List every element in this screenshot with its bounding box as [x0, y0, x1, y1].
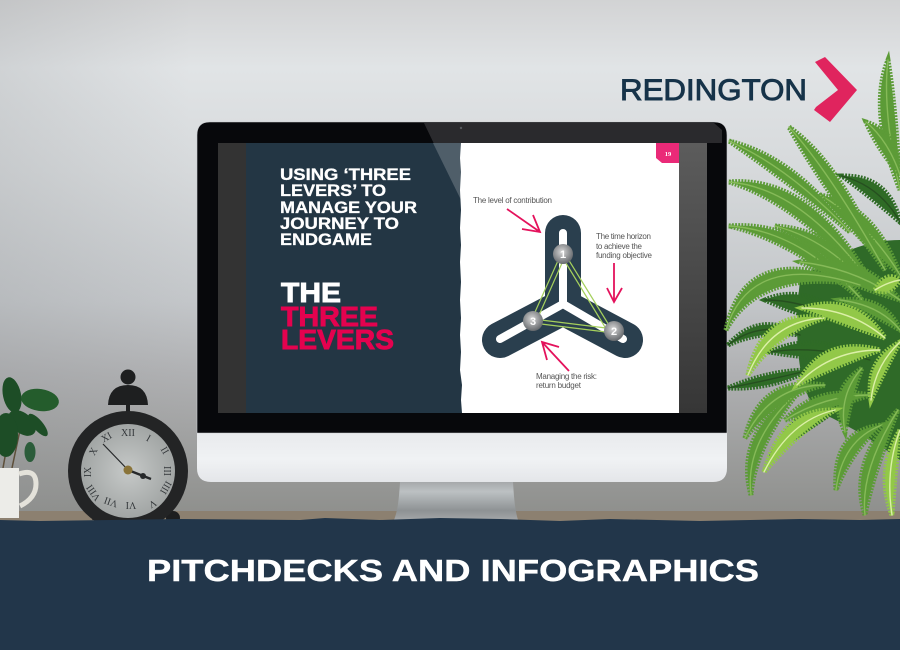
- page number tag: 19: [665, 151, 672, 158]
- lever ball 1: 1: [560, 249, 566, 261]
- banner rough top edge: [0, 518, 900, 650]
- green connecting lines: [531, 254, 614, 333]
- frond 1: [729, 141, 850, 232]
- plant stems: [3, 430, 20, 468]
- label: time horizon: to achieve the: [596, 242, 643, 251]
- slide title: the three levers: THE: [281, 277, 341, 308]
- frond 4: [729, 226, 862, 300]
- plant leaves: [0, 376, 60, 462]
- slide heading: USING ‘THREE: [280, 166, 411, 184]
- clock neck: [126, 404, 130, 414]
- clock numerals: V: [146, 497, 158, 510]
- coffee cup: [0, 468, 19, 518]
- frond mid dark right: [840, 299, 900, 330]
- label: level of contribution: The level of contribution: [473, 196, 552, 205]
- label: managing the risk: [536, 372, 597, 390]
- desktop computer monitor: [197, 122, 727, 520]
- clock numerals: VIII: [85, 482, 103, 503]
- monitor chin: [197, 425, 727, 482]
- frond bright tip right: [875, 277, 900, 292]
- clock numerals: XII: [121, 428, 135, 439]
- banner caption: PITCHDECKS AND INFOGRAPHICS: [147, 553, 759, 588]
- lever ball 3: 3: [530, 316, 536, 328]
- clock numerals: [83, 428, 173, 510]
- slide: right margin: [679, 143, 707, 413]
- arrow: contribution: [507, 209, 540, 232]
- clock numerals: XI: [99, 430, 114, 445]
- slide heading: [280, 166, 417, 249]
- frond mid lower: [838, 368, 862, 432]
- frond 3: [729, 182, 875, 290]
- clock numerals: VII: [103, 494, 120, 509]
- frond bottom left 2: [745, 384, 825, 438]
- frond far right bottom: [885, 430, 900, 515]
- frond bright right: [870, 342, 900, 400]
- arrow: risk budget: [542, 342, 569, 371]
- frond 5: [775, 226, 870, 290]
- slide heading: JOURNEY TO: [280, 215, 399, 233]
- dark frond low centre: [775, 400, 850, 450]
- slide: left margin: [218, 143, 246, 413]
- frond upper right: [866, 122, 900, 175]
- clock body: [68, 411, 188, 531]
- coffee plant: [0, 376, 60, 518]
- clock numerals: IIII: [157, 479, 173, 496]
- bottom banner: [0, 518, 900, 650]
- frond lower centre: [836, 425, 882, 490]
- clock numerals: III: [161, 466, 172, 476]
- dark frond left of mass lower: [770, 343, 870, 360]
- filler frond right upper: [820, 195, 900, 275]
- frond bright lower: [797, 347, 880, 385]
- clock numerals: IX: [83, 466, 94, 477]
- clock hands: [103, 444, 151, 479]
- slide heading: MANAGE YOUR: [280, 199, 417, 217]
- slide heading: LEVERS’ TO: [280, 182, 386, 200]
- alarm clock: [68, 370, 188, 531]
- wall shading at left edge: [0, 0, 190, 522]
- clock bell: [108, 385, 148, 405]
- logo chevron: [814, 57, 857, 122]
- fern plant: [726, 60, 900, 515]
- fern foliage mass: [797, 240, 900, 460]
- label: time horizon: [596, 232, 653, 260]
- slide: torn white page: [460, 143, 679, 413]
- clock numerals: I: [144, 433, 152, 444]
- three levers diagram: [500, 233, 625, 341]
- label: time horizon: The time horizon: [596, 232, 651, 241]
- label: managing the risk: Managing the risk:: [536, 372, 597, 381]
- logo wordmark: REDINGTON: [620, 74, 807, 107]
- filler frond centre right: [800, 260, 900, 300]
- monitor bezel: [197, 122, 727, 433]
- frond bottom left dark: [748, 390, 800, 495]
- slide: navy page: [246, 143, 462, 413]
- clock face: [81, 424, 175, 518]
- label: managing the risk: return budget: [536, 381, 582, 390]
- frond lower left bright: [764, 410, 835, 472]
- logo: Redington: [620, 57, 857, 122]
- lever arms: [500, 233, 625, 340]
- slide title: the three levers: LEVERS: [281, 324, 394, 355]
- lever slots: [500, 233, 623, 339]
- clock knob: [120, 370, 136, 384]
- arrow: time horizon: [607, 263, 622, 302]
- monitor stand: [394, 482, 518, 520]
- frond arch bright: [748, 317, 825, 375]
- frond left low: [728, 325, 800, 345]
- frond left arch: [726, 269, 860, 330]
- frond top right: [880, 60, 900, 190]
- frond left lower: [728, 370, 810, 388]
- lever ball 2: 2: [611, 326, 617, 338]
- slide: glare on navy page: [433, 143, 461, 200]
- cup handle: [19, 472, 36, 506]
- desk surface: [0, 511, 900, 522]
- slide heading: ENDGAME: [280, 231, 372, 249]
- clock numerals: X: [87, 445, 101, 458]
- page number tag: [656, 143, 679, 163]
- label: time horizon: funding objective: [596, 251, 653, 260]
- slide title: the three levers: [281, 277, 394, 355]
- clock numerals: VI: [126, 499, 136, 510]
- webcam dot: [460, 127, 462, 129]
- frond bright centre: [802, 304, 885, 338]
- dark frond top: [842, 176, 900, 222]
- slide title: the three levers: THREE: [281, 301, 378, 332]
- dark frond left of mass: [765, 294, 860, 330]
- bezel glare: [424, 123, 722, 200]
- clock feet: [92, 508, 180, 525]
- frond lower right: [861, 410, 898, 515]
- filler frond lower middle: [785, 393, 870, 420]
- clock numerals: II: [158, 445, 171, 456]
- frond 2: [789, 127, 885, 270]
